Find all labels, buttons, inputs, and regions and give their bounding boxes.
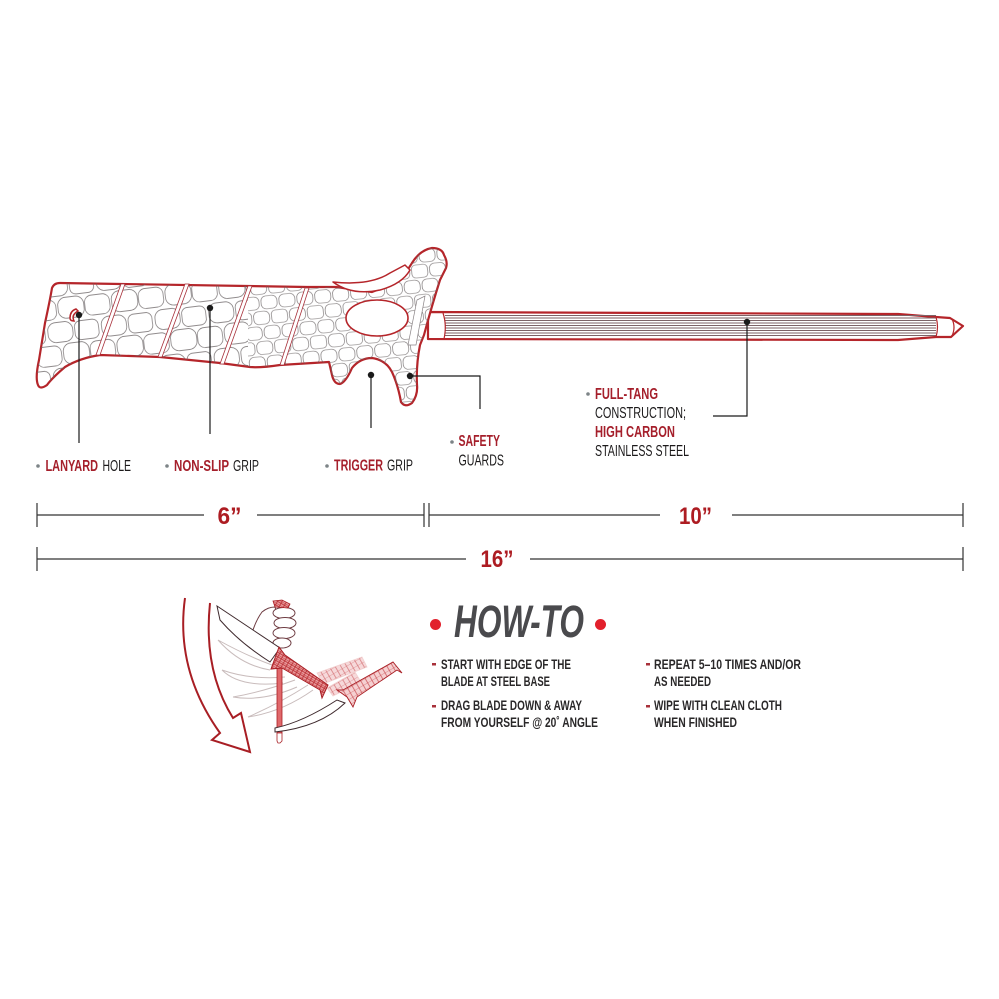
dimension: 16 inch [37, 546, 963, 573]
rod outline [428, 312, 963, 340]
label: full-tang construction: STAINLESS STEEL [595, 443, 689, 460]
illustration: how-to sharpening motion [183, 598, 402, 752]
step: drag blade: DRAG BLADE DOWN & AWAY [441, 697, 582, 713]
step: wipe [646, 697, 782, 730]
step: repeat: REPEAT 5–10 TIMES AND/OR [654, 656, 801, 672]
step: start with edge: START WITH EDGE OF THE [441, 656, 571, 672]
dimension: 16 inch: 16” [480, 546, 514, 573]
honing steel rod [428, 312, 963, 340]
label: lanyard hole: HOLE [102, 458, 131, 475]
label: safety guards [450, 433, 504, 470]
steel rod [277, 667, 282, 743]
oval cutout [346, 300, 408, 336]
label: full-tang construction [586, 386, 689, 460]
label: non-slip grip: GRIP [233, 458, 259, 475]
label: full-tang construction: FULL-TANG [595, 386, 658, 403]
step: start with edge: BLADE AT STEEL BASE [441, 673, 550, 689]
crocodile scale texture [36, 245, 453, 410]
label: trigger grip: TRIGGER [334, 458, 383, 474]
label: non-slip grip: NON-SLIP [174, 458, 229, 475]
heading: how-to: HOW-TO [454, 596, 584, 647]
leader: full-tang [713, 319, 750, 416]
rod tip [936, 317, 954, 337]
spiral grip bands [96, 284, 309, 365]
back of hand [252, 607, 285, 645]
label: lanyard hole: LANYARD [46, 458, 98, 475]
step: wipe: WHEN FINISHED [654, 714, 737, 730]
lower knife blade [275, 700, 345, 732]
step: repeat [646, 656, 801, 689]
step: repeat: AS NEEDED [654, 673, 711, 689]
leader: lanyard hole [76, 312, 82, 443]
finger guard crescent [333, 265, 410, 292]
handle body [37, 248, 447, 405]
ghost blades [218, 640, 313, 717]
leader: safety guards [407, 373, 480, 409]
fingers [273, 608, 296, 648]
label: trigger grip: GRIP [387, 458, 413, 474]
step: drag blade: FROM YOURSELF @ 20˚ ANGLE [441, 714, 598, 730]
dimension: 6 inch [37, 503, 424, 530]
ghost handles [317, 657, 367, 696]
label: safety guards: SAFETY [458, 433, 500, 450]
upper knife handle [271, 647, 328, 698]
label: full-tang construction: HIGH CARBON [595, 424, 675, 441]
guard slot [408, 296, 425, 345]
lanyard hole [70, 309, 78, 321]
butt of handle above hand [273, 600, 290, 608]
knife handle [36, 245, 453, 410]
dimension: 10 inch [429, 503, 963, 530]
dimension: 10 inch: 10” [679, 503, 712, 530]
rod grooves [445, 316, 936, 336]
step: start with edge [432, 656, 571, 689]
step: drag blade [432, 697, 598, 730]
step: wipe: WIPE WITH CLEAN CLOTH [654, 697, 782, 713]
dimension: 6 inch: 6” [218, 503, 242, 530]
hand [252, 600, 296, 648]
label: safety guards: GUARDS [458, 452, 504, 470]
leader: trigger grip [368, 372, 374, 428]
upper knife blade [217, 606, 280, 662]
leader: non-slip grip [207, 305, 213, 434]
rod collar [443, 313, 445, 339]
curved arrow [183, 598, 250, 752]
lower knife handle [337, 662, 402, 707]
label: full-tang construction: CONSTRUCTION; [595, 405, 686, 422]
